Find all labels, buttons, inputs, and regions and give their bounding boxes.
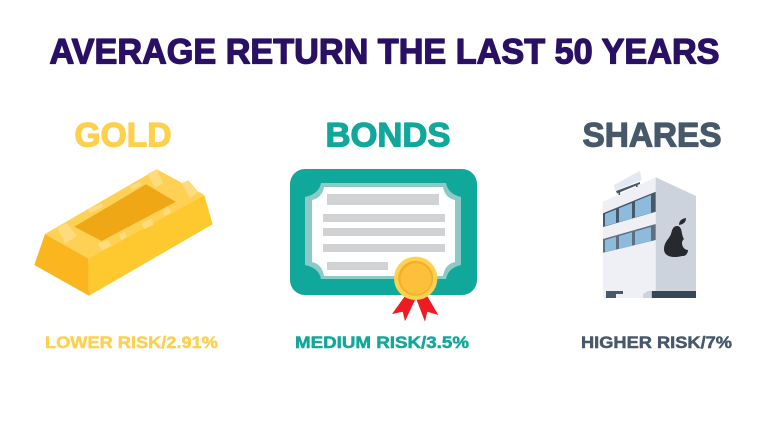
heading: bonds: BONDS [326,116,450,154]
heading: shares: SHARES [582,116,722,154]
panel: shares [581,116,732,352]
icon: pear logo [664,226,688,257]
icon: ribbon [392,295,438,322]
icon: gold bar [34,169,213,296]
panel: gold [34,116,218,352]
icon: certificate [290,169,477,322]
rooftop sign [614,171,642,195]
icon: pear leaf [679,218,686,225]
heading: gold: GOLD [74,116,172,154]
icon: medal [394,257,437,300]
caption: shares: HIGHER RISK/7% [581,333,732,352]
windows: upper row [603,192,656,227]
caption: bonds: MEDIUM RISK/3.5% [295,333,469,352]
icon: office building [603,171,696,298]
caption: gold: LOWER RISK/2.91% [45,333,218,352]
windows: lower row [603,224,656,253]
title: AVERAGE RETURN THE LAST 50 YEARS [50,32,720,72]
panel: bonds [290,116,477,352]
